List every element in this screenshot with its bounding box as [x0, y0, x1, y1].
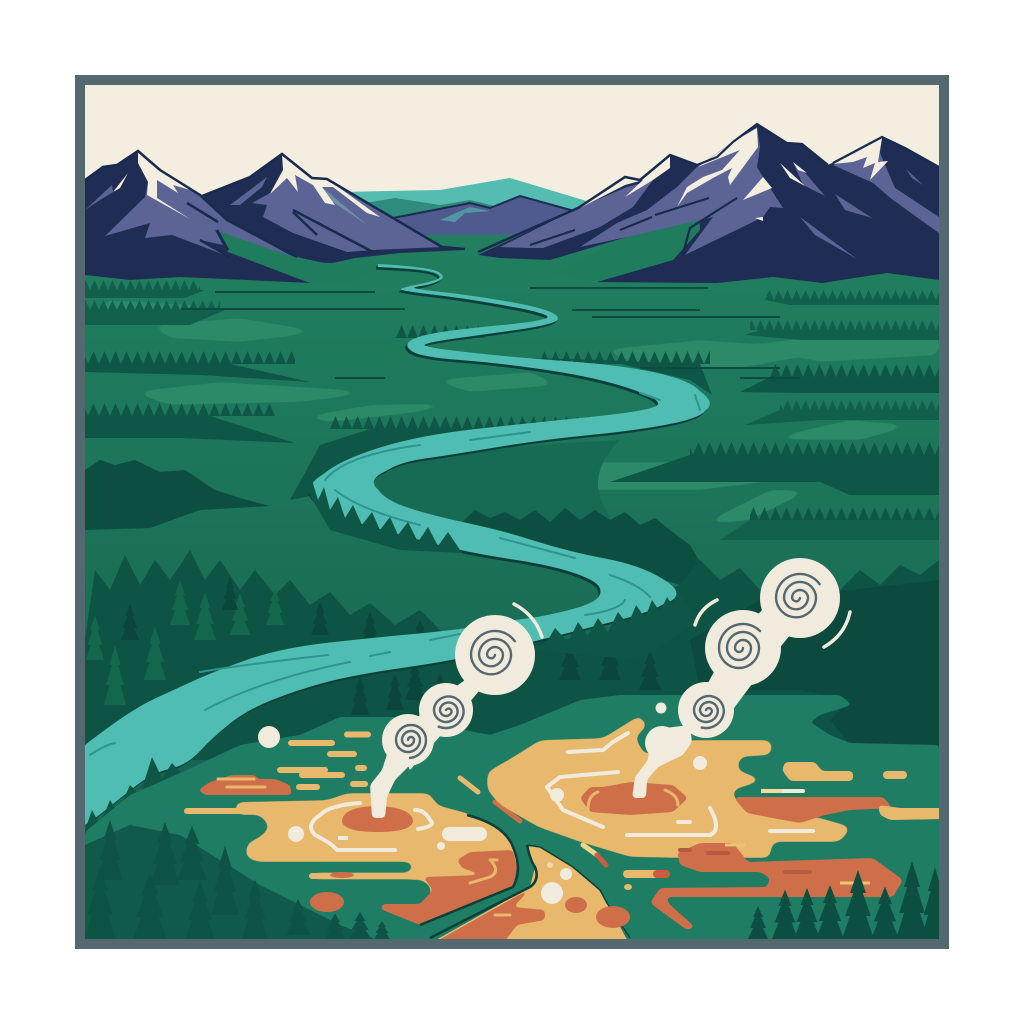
meadow shading blobs: [100, 300, 939, 525]
orange deposit left: [380, 850, 517, 925]
tree teeth along river banks: [307, 480, 462, 553]
left mountains: [85, 151, 465, 285]
yellow deposit left: [235, 793, 517, 925]
steam plume: right geyser: [632, 558, 850, 798]
steam plume: left geyser: [258, 604, 542, 818]
yellow strip far right: [782, 762, 945, 820]
deep forest shade right: [690, 580, 939, 745]
band: left forest 4: [85, 403, 295, 443]
yellow dash far right: [887, 771, 903, 779]
spirals: [396, 627, 516, 758]
mountain: back left peak: [200, 154, 465, 263]
rim blob: [550, 788, 564, 802]
green wedge right: [636, 220, 700, 235]
river flow lines: [90, 393, 700, 755]
scene: [83, 85, 949, 945]
band: right forest 5: [610, 442, 939, 495]
yellow deposit right: [487, 715, 852, 858]
yellow creek delta: [427, 845, 630, 945]
frame: [80, 80, 944, 944]
distant teal hills: [350, 178, 586, 235]
dots and spots left: [288, 826, 630, 928]
spirals: [689, 570, 821, 733]
steam discs: [382, 615, 535, 770]
orange deposit upper: [733, 797, 893, 823]
white rim lines left: [311, 803, 432, 850]
steam bulge: [645, 726, 679, 760]
creek outlines: [420, 815, 537, 938]
band: right forest 1: [765, 290, 939, 305]
motion arcs: [695, 600, 850, 647]
orange deposit lower: [650, 843, 903, 930]
band: left forest 3: [85, 351, 310, 382]
geyser basin: right: [487, 702, 945, 930]
sky: [85, 85, 939, 201]
orange spring pool right: [580, 782, 688, 815]
orange pool upper left: [198, 775, 292, 795]
horizontal meadow lines: [182, 288, 800, 378]
band: right forest 2: [745, 320, 939, 340]
motion arc: [514, 604, 542, 637]
foreground forest: lower right: [748, 861, 949, 939]
band: right forest 3: [740, 364, 939, 393]
trees: lighter left: [86, 580, 917, 705]
orange spring pool left: [342, 806, 413, 832]
right mountains: [478, 124, 939, 283]
mountain: front left peak: [85, 151, 310, 283]
inner oval of river bend: [374, 440, 620, 516]
band: left forest 5: [85, 460, 270, 530]
white streaks right: [547, 733, 813, 835]
band: small forest upper middle: [395, 325, 712, 395]
orange creek delta: [430, 887, 545, 945]
steam ball: [258, 726, 280, 748]
details right: [583, 702, 870, 890]
band: left forest 2: [85, 300, 225, 325]
foreground forest: lower left: [84, 820, 390, 945]
green wedge: [219, 231, 324, 263]
mountain: main peak: [580, 124, 939, 283]
band: right forest 4: [745, 400, 939, 425]
band: upper left forest: [85, 280, 205, 298]
upper-left dashes: [280, 734, 368, 787]
steam discs: [678, 558, 840, 738]
meadow base: [85, 235, 939, 830]
lower dark forest: [85, 550, 939, 760]
forest below river bend: [462, 508, 705, 585]
river water: [85, 264, 710, 825]
illustration: valley landscape: [75, 75, 949, 949]
band: right forest 6: [720, 507, 939, 540]
river shadow: [83, 266, 708, 828]
mountain: left shoulder: [478, 154, 698, 260]
diagonal dashes: [460, 778, 478, 792]
geyser basin: left: [187, 734, 630, 945]
geyser land: [85, 695, 939, 945]
river: [83, 264, 710, 860]
yellow strip left: [187, 811, 420, 876]
trees: dark accents: [121, 577, 661, 715]
forest bands: [85, 280, 939, 585]
band: forest above river bend: [290, 416, 589, 500]
